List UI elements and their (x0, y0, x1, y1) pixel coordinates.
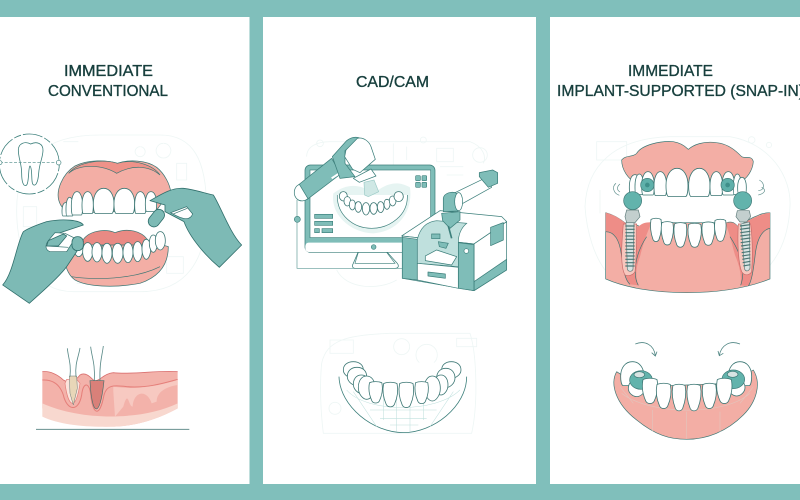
illustration: hands fitting denture (0, 134, 242, 303)
icon: tooth in dashed circle (0, 134, 61, 194)
upper denture (58, 161, 171, 216)
connector wire (294, 200, 403, 268)
left gloved hand (3, 220, 83, 303)
heading: immediate conventional: IMMEDIATE (64, 63, 153, 80)
heading: immediate implant-supported (snap-in) (557, 63, 800, 100)
right implant (734, 192, 752, 271)
intraoral scanner (294, 137, 379, 201)
upper denture (622, 142, 753, 197)
heading: immediate conventional (48, 63, 168, 100)
panel: immediate implant-supported snap-in (550, 17, 800, 484)
lower denture (65, 230, 168, 286)
right gloved hand (146, 188, 242, 267)
illustration: lower snap-in denture (614, 343, 757, 439)
tooth row (343, 362, 461, 408)
instruments (67, 346, 103, 381)
panel: immediate conventional (0, 17, 250, 484)
model mesh (347, 383, 460, 432)
snap motion marks (614, 180, 765, 195)
faint tech background (321, 333, 477, 433)
gum base (614, 370, 757, 439)
heading: immediate conventional: CONVENTIONAL (48, 83, 168, 100)
heading: immediate implant-supported (snap-in): IMMEDIATE (628, 63, 713, 80)
screen buttons (315, 176, 427, 233)
milling machine (402, 170, 507, 291)
heading: CAD/CAM: CAD/CAM (356, 74, 429, 91)
illustration: milled digital denture (321, 333, 477, 433)
left implant (624, 192, 642, 271)
lower jaw with implants (606, 213, 770, 293)
illustration: scanner, monitor and milling machine (294, 137, 507, 291)
back teeth (621, 362, 752, 397)
panel: CAD/CAM (263, 17, 536, 484)
snap attachment right (722, 370, 745, 389)
dental arch on screen (333, 183, 410, 233)
monitor (305, 165, 435, 268)
illustration: snap-in denture over implants (585, 137, 790, 293)
snap direction arrows (635, 343, 740, 356)
front teeth (642, 378, 732, 411)
snap attachment left (630, 371, 652, 389)
illustration: gum tissue cross-section (36, 346, 189, 429)
